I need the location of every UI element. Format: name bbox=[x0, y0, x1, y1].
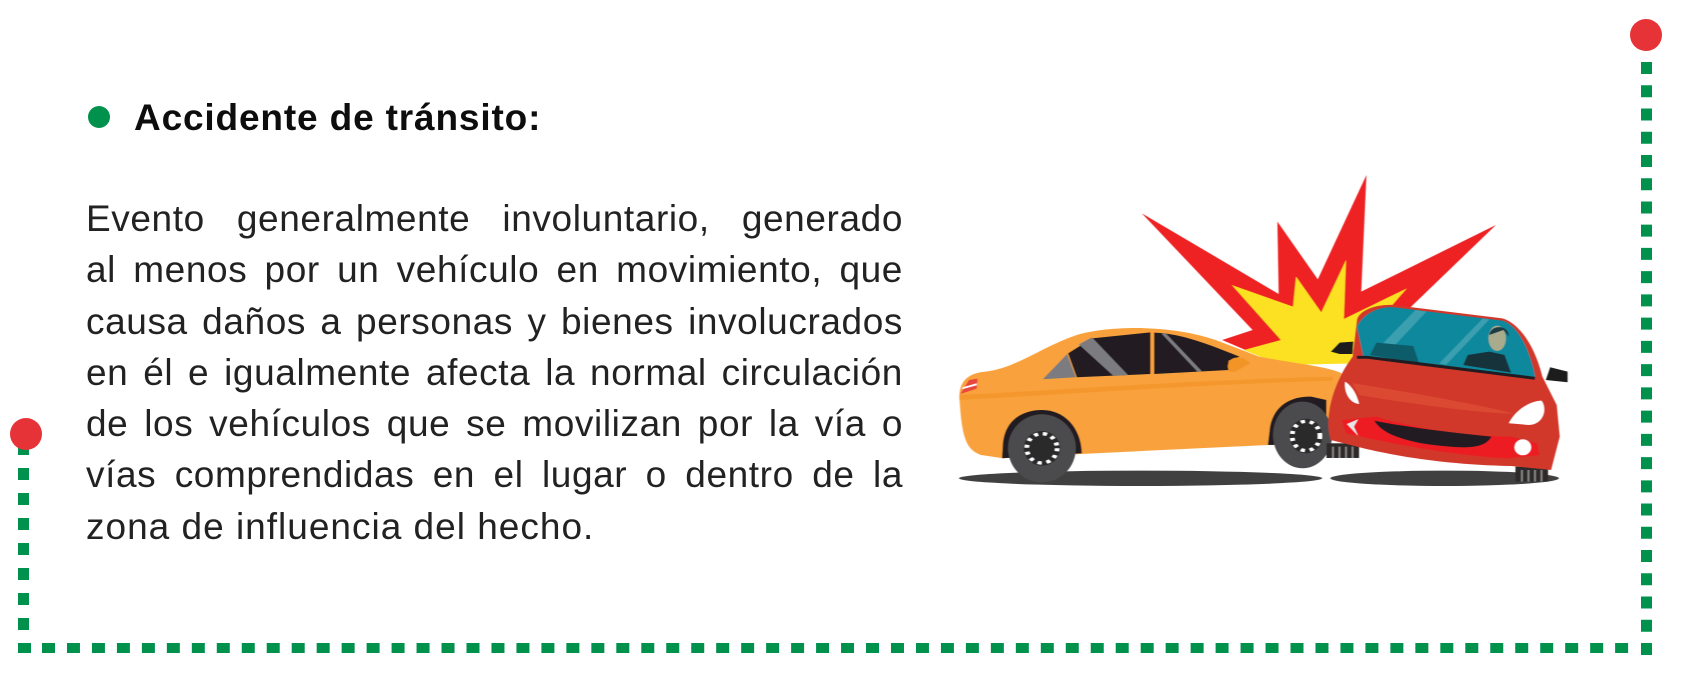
body paragraph: de los vehículos que se movilizan por la vía o bbox=[86, 403, 903, 444]
rear wheel bbox=[1008, 414, 1076, 482]
explosion yellow bbox=[1232, 260, 1407, 365]
orange car bbox=[959, 328, 1342, 482]
orange car shading bbox=[959, 377, 1333, 400]
body paragraph: en él e igualmente afecta la normal circulación bbox=[86, 352, 903, 393]
red car tire left bbox=[1326, 443, 1359, 458]
right headlight bbox=[1509, 401, 1544, 425]
front window stripe bbox=[1161, 333, 1202, 372]
body paragraph: al menos por un vehículo en movimiento, que bbox=[86, 249, 903, 290]
grille bbox=[1374, 421, 1492, 447]
driver bbox=[1463, 326, 1511, 373]
fog lamp bbox=[1515, 439, 1531, 455]
left lamp bbox=[1347, 419, 1358, 436]
left headlight bbox=[1345, 382, 1359, 404]
bumper bbox=[1342, 417, 1539, 458]
hood highlight bbox=[1353, 383, 1513, 413]
tail light bbox=[960, 379, 978, 394]
rear wheel arch bbox=[1002, 410, 1082, 458]
body paragraph bbox=[86, 198, 903, 547]
bullet dot bbox=[88, 106, 110, 128]
left mirror bbox=[1331, 342, 1353, 354]
ground shadows bbox=[959, 471, 1559, 486]
body paragraph: Evento generalmente involuntario, generado bbox=[86, 198, 903, 239]
red point right bbox=[1630, 19, 1662, 51]
rear window glare bbox=[1043, 354, 1076, 379]
orange car body bbox=[959, 328, 1342, 458]
body paragraph: vías comprendidas en el lugar o dentro de la bbox=[86, 454, 903, 495]
red car bbox=[1326, 305, 1568, 482]
right dotted line bbox=[1641, 62, 1652, 655]
explosion red bbox=[1142, 175, 1496, 363]
front wheel bbox=[1273, 402, 1332, 468]
rear window stripe bbox=[1079, 337, 1128, 376]
bottom dotted line bbox=[42, 643, 1630, 653]
heading: Accidente de tránsito: bbox=[134, 97, 541, 138]
left dotted line bbox=[18, 443, 29, 643]
seat bbox=[1370, 343, 1419, 363]
rear window bbox=[1068, 332, 1151, 377]
red point left bbox=[10, 418, 42, 450]
front wheel arch bbox=[1268, 397, 1326, 445]
windshield bbox=[1357, 307, 1535, 377]
mirror bbox=[1228, 357, 1250, 372]
right mirror bbox=[1546, 367, 1568, 382]
wiper line bbox=[1357, 357, 1535, 378]
windshield glare bbox=[1376, 310, 1489, 365]
front window bbox=[1154, 333, 1240, 374]
red car body bbox=[1328, 305, 1560, 470]
corner square left bbox=[18, 643, 31, 653]
body paragraph: zona de influencia del hecho. bbox=[86, 506, 594, 547]
body paragraph: causa daños a personas y bienes involucrados bbox=[86, 301, 903, 342]
red car tire right bbox=[1515, 467, 1548, 482]
